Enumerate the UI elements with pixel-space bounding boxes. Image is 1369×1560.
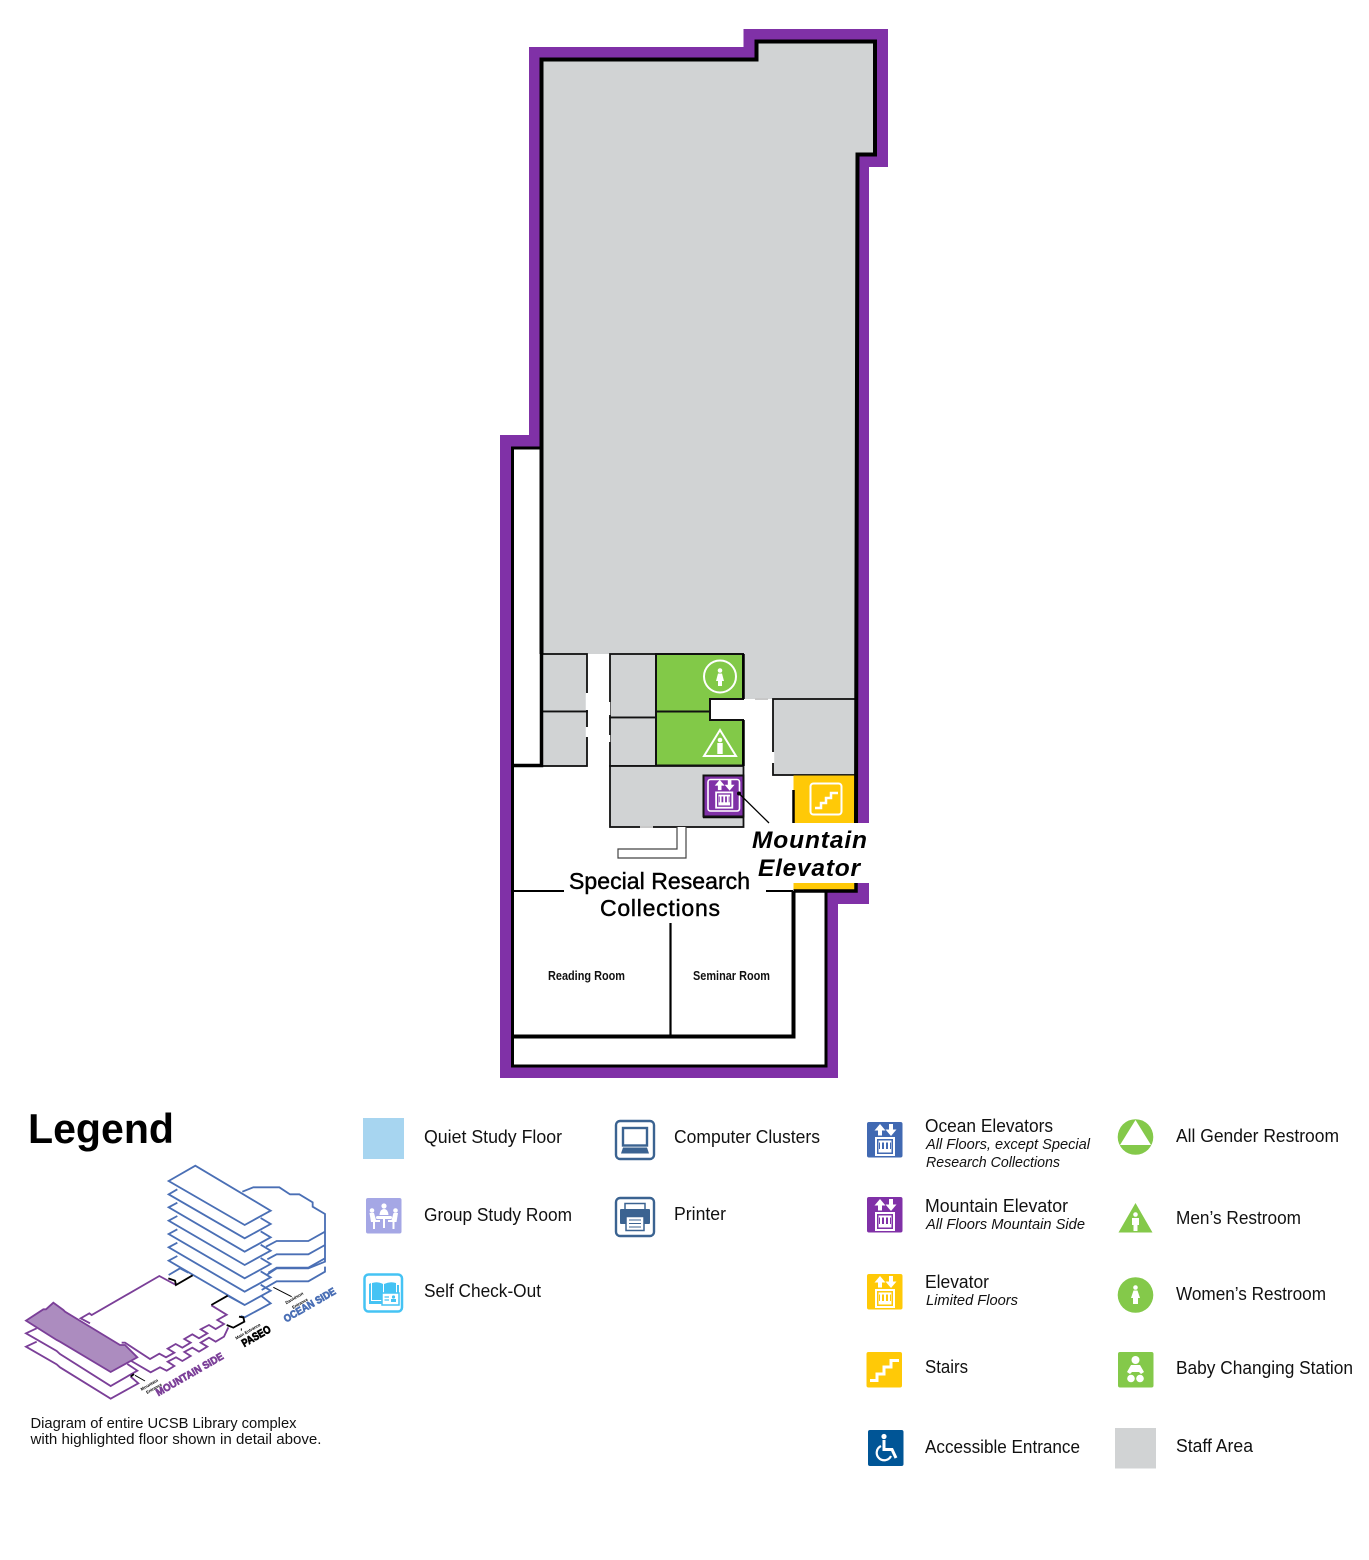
legend: all gender restroom: All Gender Restroom <box>1176 1126 1339 1146</box>
staff area: main gray <box>542 42 875 699</box>
ocean side tower: blue floors <box>169 1166 325 1317</box>
legend: self check-out <box>364 1274 541 1312</box>
legend: accessible entrance: Accessible Entrance <box>925 1437 1080 1457</box>
label background <box>857 823 882 883</box>
diagram caption <box>29 1416 322 1448</box>
side labels: OCEAN SIDE <box>282 1286 338 1325</box>
label: Special Research Collections <box>569 868 750 921</box>
legend: ocean elevators: Research Collections <box>926 1155 1060 1171</box>
label: Reading Room: Reading Room <box>548 969 625 983</box>
diagram caption: with highlighted floor shown in detail above. <box>29 1432 322 1448</box>
legend: mountain elevator <box>867 1196 1085 1233</box>
label: Mountain Elevator: Elevator <box>758 855 861 882</box>
floor plan <box>500 29 888 1078</box>
black connector strokes <box>131 1275 244 1377</box>
legend: men's restroom <box>1118 1203 1301 1232</box>
side labels: PASEO <box>240 1323 274 1350</box>
side labels: Entrance <box>291 1297 309 1310</box>
ramp <box>618 827 686 858</box>
mountain side: purple floors <box>26 1276 228 1399</box>
legend: group study room: Group Study Room <box>424 1205 572 1225</box>
legend: ocean elevators <box>867 1116 1091 1171</box>
legend: computer clusters <box>616 1121 820 1159</box>
legend: ocean elevators: Ocean Elevators <box>925 1116 1053 1136</box>
legend: women's restroom: Women’s Restroom <box>1176 1284 1326 1304</box>
restrooms <box>656 654 743 766</box>
diagram caption: Diagram of entire UCSB Library complex <box>30 1416 297 1432</box>
legend: self check-out: Self Check-Out <box>424 1281 541 1301</box>
side labels <box>140 1286 338 1399</box>
legend: printer <box>616 1198 726 1236</box>
legend: printer: Printer <box>674 1204 726 1224</box>
icon: men's restroom on map <box>704 730 736 756</box>
legend: baby changing station <box>1118 1352 1353 1388</box>
legend: staff area: Staff Area <box>1176 1436 1254 1456</box>
door gaps <box>587 693 773 763</box>
interior floor <box>512 41 875 1066</box>
label: Special Research Collections: Special Research <box>569 868 750 894</box>
side labels: Entrance <box>145 1382 163 1395</box>
side labels: Mountain <box>140 1378 159 1392</box>
legend: accessible entrance <box>868 1430 1080 1466</box>
icon: stairs on map <box>810 784 842 814</box>
legend: quiet study floor <box>363 1118 562 1159</box>
legend: stairs <box>866 1352 968 1388</box>
building outline: purple <box>500 29 888 1078</box>
stairs room <box>794 776 856 824</box>
entrance arrows <box>135 1287 292 1381</box>
icon: mountain elevator on map <box>704 776 744 816</box>
legend: group study room <box>366 1198 572 1234</box>
side labels: MOUNTAIN SIDE <box>154 1351 226 1399</box>
legend: mountain elevator: Mountain Elevator <box>925 1196 1068 1216</box>
legend: ocean elevators: All Floors, except Special <box>925 1137 1091 1153</box>
corridor <box>588 655 772 776</box>
isometric library diagram <box>26 1166 338 1399</box>
side labels: Main Entrance <box>234 1322 262 1341</box>
label: Mountain Elevator: Mountain <box>752 827 867 854</box>
side labels: Davidson <box>284 1291 304 1305</box>
legend: women's restroom <box>1118 1277 1326 1313</box>
walls <box>512 42 875 1066</box>
gray rooms <box>542 654 856 827</box>
legend heading: Legend <box>28 1105 174 1152</box>
legend: all gender restroom <box>1118 1119 1339 1155</box>
legend: elevator: Limited Floors <box>926 1293 1018 1309</box>
legend: baby changing station: Baby Changing Station <box>1176 1358 1353 1378</box>
leader line <box>737 792 769 823</box>
legend: men's restroom: Men’s Restroom <box>1176 1208 1301 1228</box>
label: Mountain Elevator <box>752 827 867 882</box>
legend: stairs: Stairs <box>925 1357 968 1377</box>
legend: staff area <box>1115 1428 1254 1468</box>
legend: quiet study floor: Quiet Study Floor <box>424 1127 562 1147</box>
legend: elevator <box>867 1272 1018 1310</box>
legend: mountain elevator: All Floors Mountain Side <box>925 1217 1085 1233</box>
label: Seminar Room: Seminar Room <box>693 969 770 983</box>
icon: women's restroom on map <box>704 660 736 692</box>
label: Special Research Collections: Collections <box>600 895 720 921</box>
legend: elevator: Elevator <box>925 1272 989 1292</box>
legend: computer clusters: Computer Clusters <box>674 1127 820 1147</box>
